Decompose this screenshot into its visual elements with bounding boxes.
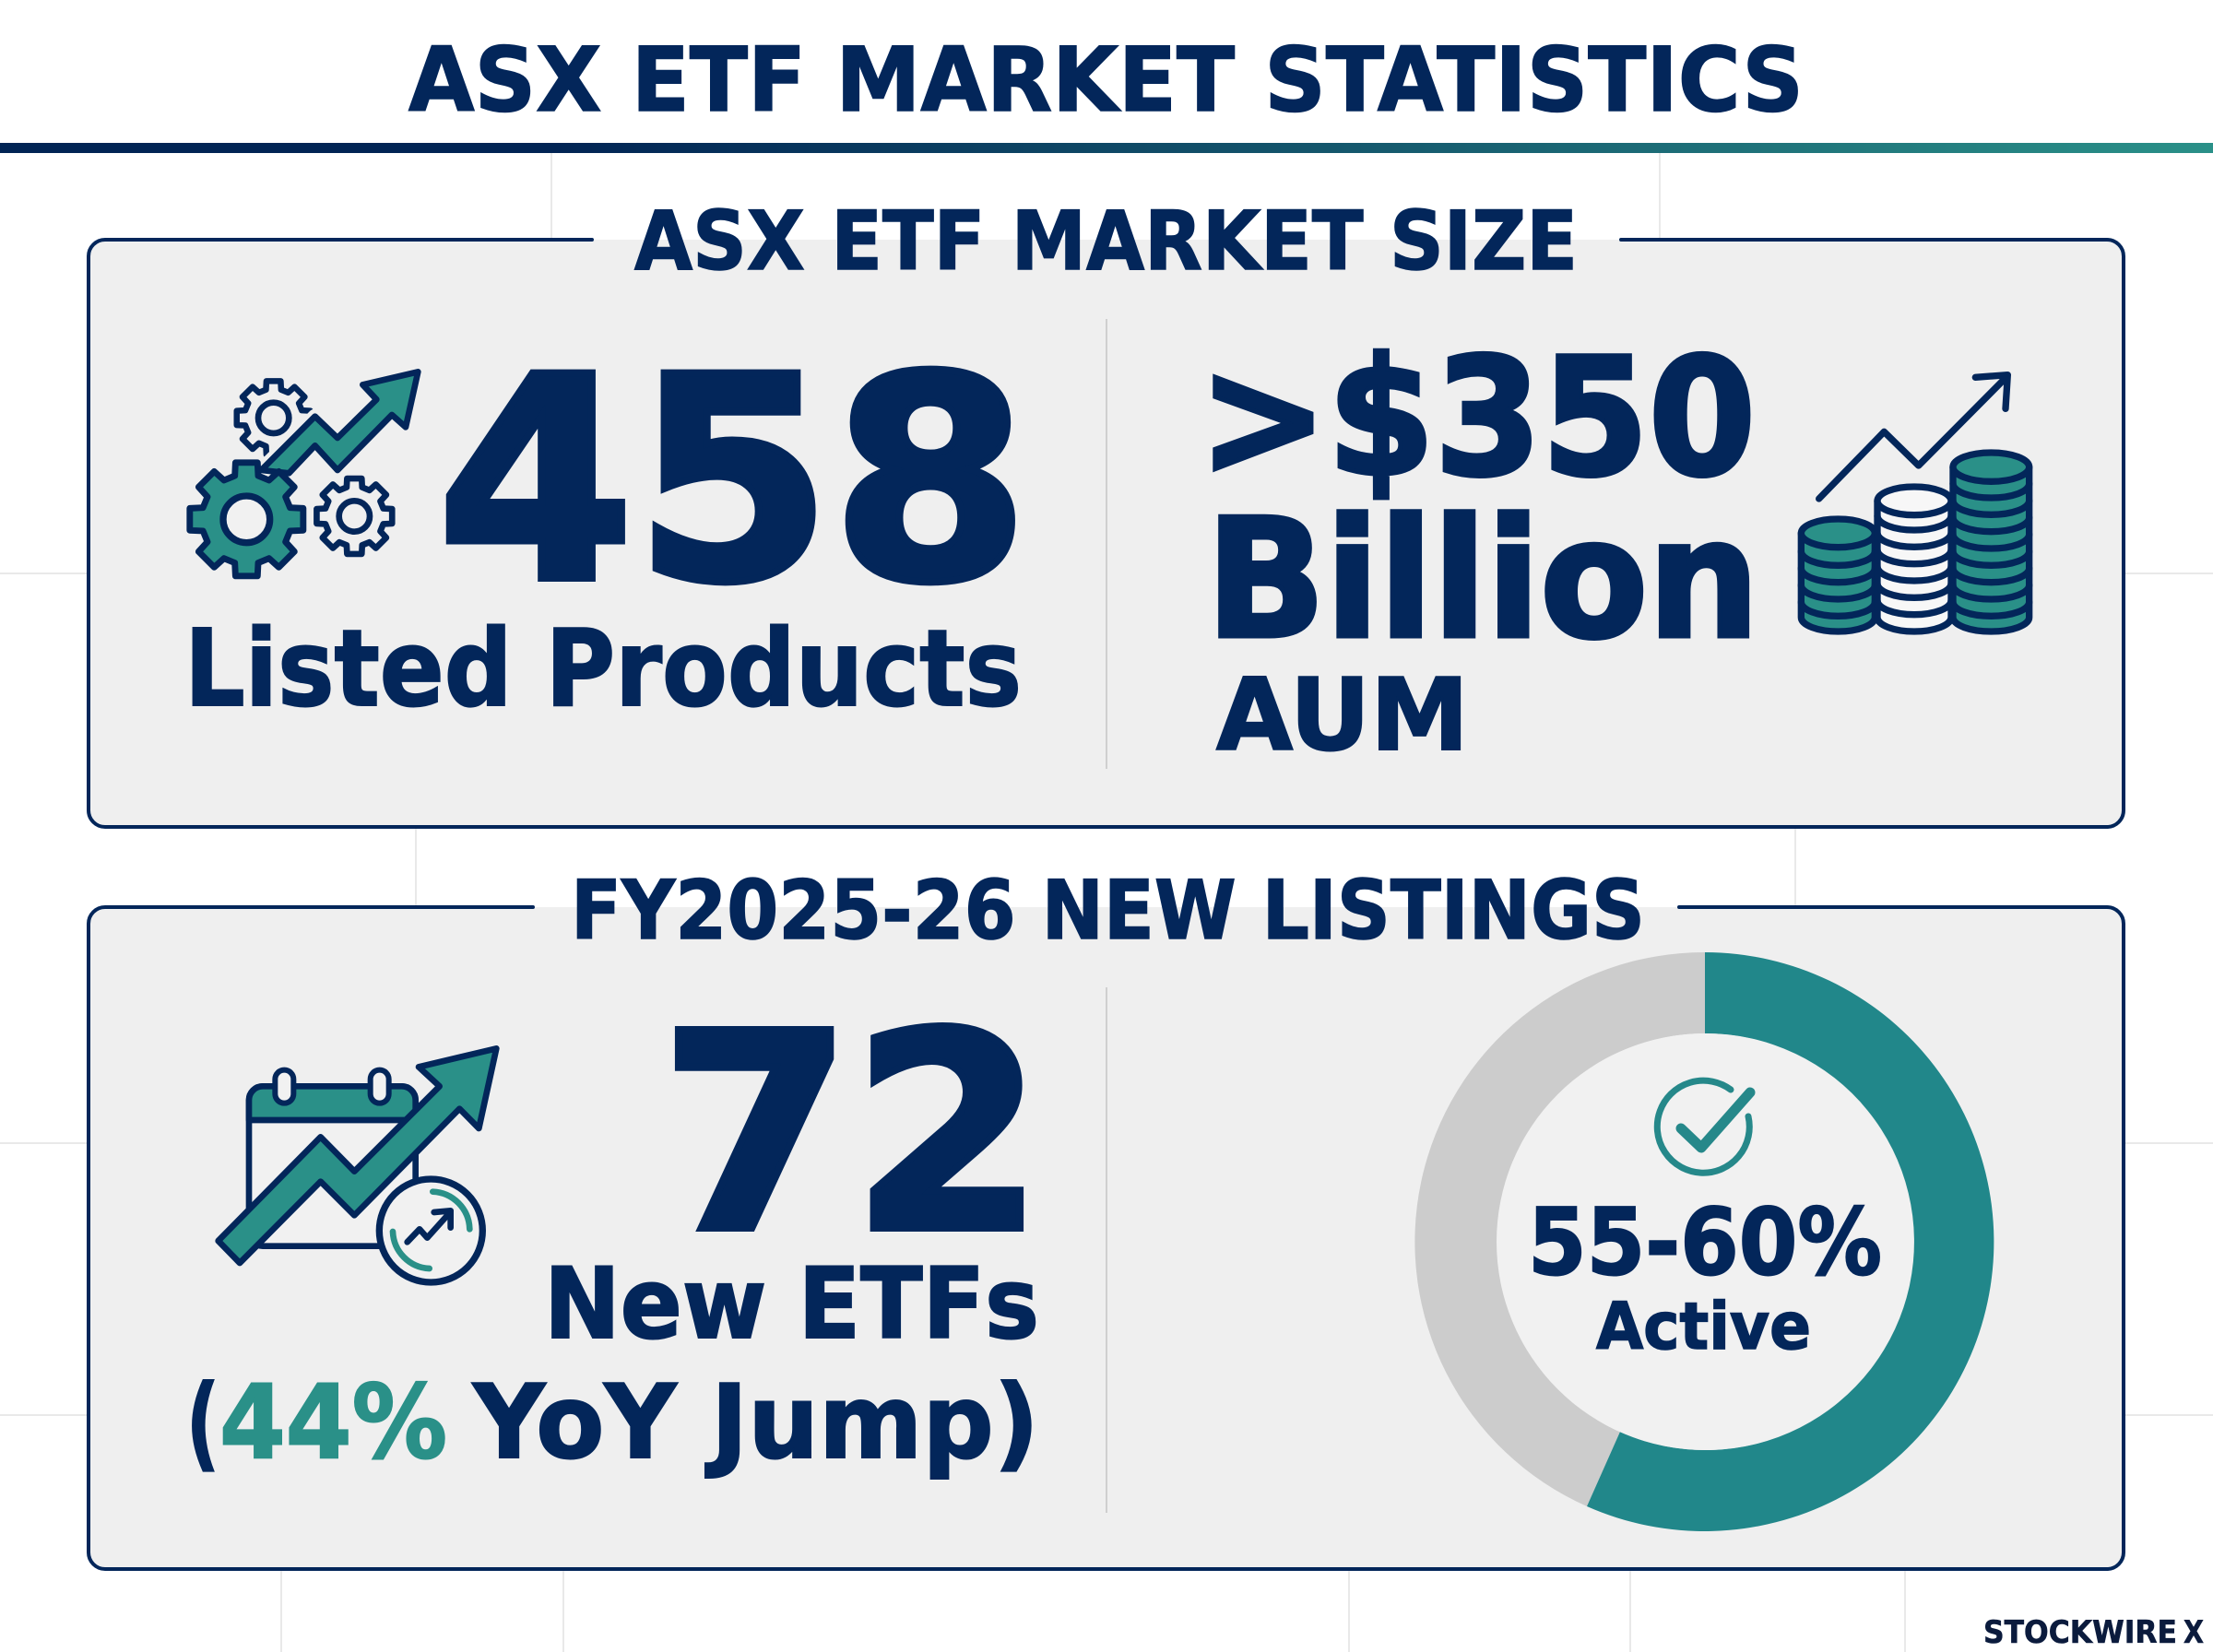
heading: new listings: FY2025-26 NEW LISTINGS bbox=[571, 863, 1645, 958]
icon: check mark in circle bbox=[1657, 1080, 1750, 1173]
panel background bbox=[89, 240, 2124, 827]
donut remainder segment bbox=[1414, 952, 1705, 1506]
panel divider bbox=[1106, 987, 1107, 1513]
icon: coin stacks with trend line bbox=[1801, 375, 2030, 631]
stat: 72: 72 bbox=[660, 975, 1044, 1292]
label: 44 percent YoY jump: YoY Jump) bbox=[471, 1363, 1039, 1482]
heading: market size: ASX ETF MARKET SIZE bbox=[634, 194, 1578, 289]
panel background bbox=[89, 907, 2124, 1569]
label: 44 percent YoY jump: 44% bbox=[219, 1363, 447, 1482]
stat: over 350: >$350 bbox=[1199, 324, 1756, 513]
donut value: 55-60% bbox=[1528, 1188, 1882, 1296]
panel: ASX ETF market size bbox=[89, 194, 2124, 827]
label: AUM: AUM bbox=[1216, 658, 1469, 773]
stat: 458: 458 bbox=[437, 317, 1029, 644]
brand: StockWire X: X bbox=[2183, 1614, 2204, 1651]
donut label: Active bbox=[1596, 1289, 1811, 1364]
icon: gears with rising arrow bbox=[190, 372, 418, 576]
stat: billion: Billion bbox=[1206, 484, 1759, 675]
panel divider bbox=[1106, 319, 1107, 769]
icon: calendar with rising arrow bbox=[219, 1048, 496, 1282]
panel border bbox=[89, 240, 2124, 827]
donut chart: active share bbox=[1414, 952, 1994, 1531]
panel border bbox=[89, 907, 2124, 1569]
brand: StockWire X: STOCKWIRE bbox=[1983, 1614, 2177, 1651]
title: ASX ETF MARKET STATISTICS bbox=[408, 29, 1804, 132]
label: listed products: Listed Products bbox=[184, 608, 1022, 731]
donut active segment bbox=[1587, 952, 1994, 1531]
label: 44 percent YoY jump bbox=[186, 1363, 1039, 1482]
donut centre bbox=[1497, 1033, 1913, 1450]
label: 44 percent YoY jump: ( bbox=[186, 1363, 219, 1482]
title gradient bar bbox=[0, 143, 2213, 153]
label: new ETFs: New ETFs bbox=[544, 1247, 1039, 1361]
panel: FY2025-26 new listings bbox=[89, 863, 2124, 1569]
